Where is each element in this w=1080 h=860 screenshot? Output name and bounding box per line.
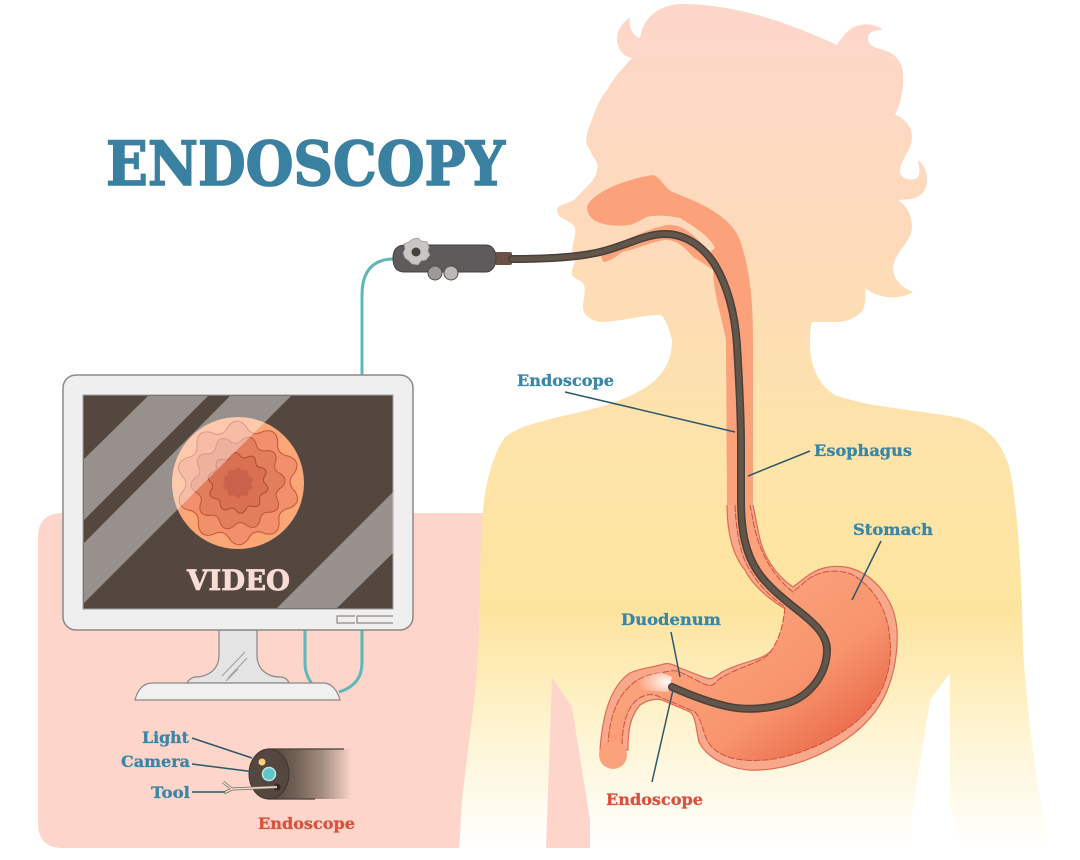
monitor buttons (337, 616, 393, 623)
light dot (258, 758, 266, 766)
label: Light: Light (142, 728, 190, 747)
title: ENDOSCOPY (106, 129, 506, 200)
stomach and duodenum (599, 505, 897, 770)
handle neck (495, 252, 512, 265)
tool outline (223, 782, 277, 793)
control knob (403, 238, 430, 265)
stand base (135, 683, 340, 700)
endoscope tube (512, 234, 827, 709)
tissue folds (178, 420, 298, 546)
video label: VIDEO (186, 564, 290, 597)
tip edge lines (268, 749, 344, 799)
label: Stomach: Stomach (853, 520, 933, 539)
tool channel (274, 784, 280, 790)
monitor stand (135, 630, 340, 700)
duodenum end cap (599, 741, 627, 769)
label: Endoscope: Endoscope (517, 371, 614, 390)
stand highlight (222, 652, 247, 681)
endoscope tube core (512, 234, 827, 709)
screen glare stripes (84, 396, 393, 608)
label: Camera: Camera (121, 752, 190, 771)
leader lines (192, 392, 881, 792)
cable: below monitor (305, 628, 362, 692)
panel: pink background (38, 513, 592, 848)
monitor (63, 375, 413, 630)
scope light glow (638, 672, 672, 692)
control buttons (428, 266, 442, 280)
camera lens (262, 768, 276, 780)
image disc (172, 417, 304, 549)
handle body (393, 245, 496, 272)
screen (83, 395, 393, 609)
label: Endoscope red: Endoscope (606, 790, 703, 809)
body silhouette (459, 4, 1050, 850)
throat and esophagus (587, 175, 753, 515)
label: Endoscope tip: Endoscope (258, 814, 355, 833)
tip body (268, 749, 352, 799)
stand neck (187, 630, 289, 683)
label: Duodenum: Duodenum (621, 610, 722, 629)
monitor frame (63, 375, 413, 630)
tip face (249, 749, 289, 799)
endoscopic image (169, 414, 307, 552)
knob hub (412, 248, 420, 256)
stomach outer wall (600, 505, 897, 770)
cable: handle to monitor (362, 259, 394, 376)
stomach inner lumen (608, 505, 890, 760)
label: Esophagus: Esophagus (814, 441, 912, 460)
endoscope tip detail (223, 749, 352, 799)
endoscope handle (393, 238, 512, 280)
label: Tool: Tool (151, 783, 190, 802)
tool core (223, 782, 277, 793)
